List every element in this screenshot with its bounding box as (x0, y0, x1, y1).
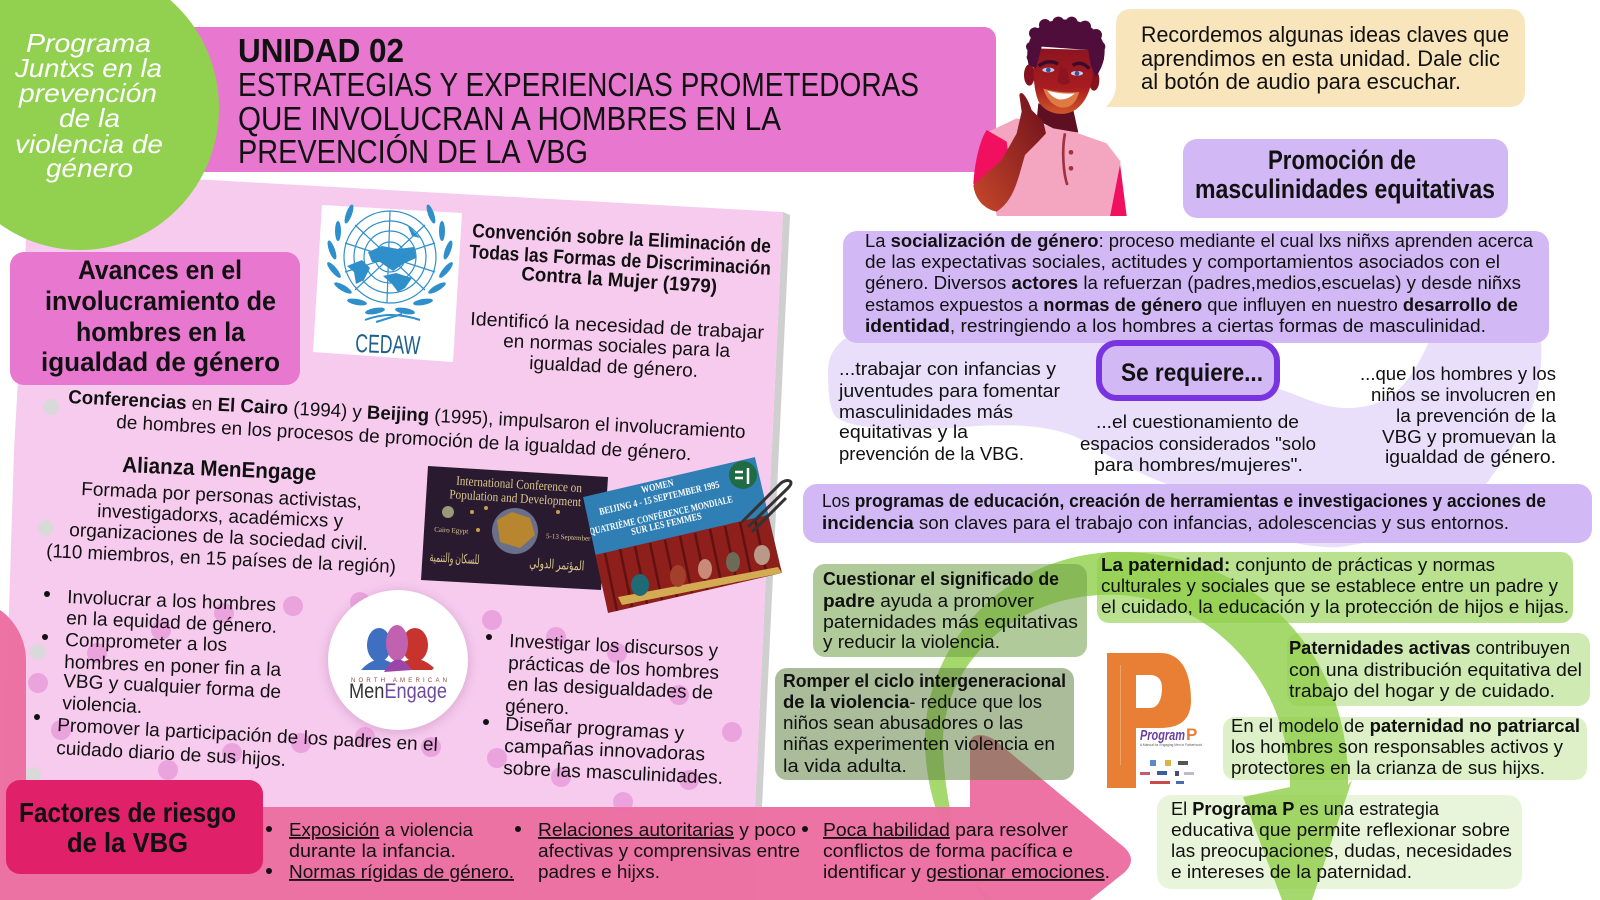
title: PREVENCIÓN DE LA VBG (238, 133, 588, 170)
text block: relaciones autoritarias (515, 819, 800, 882)
text block: exposición: Exposición a violencia (289, 819, 474, 840)
text block: poca habilidad: identificar y gestionar emociones . (823, 861, 1110, 882)
panel: socialización de género: género. Diversos actores la refuerzan (padres,medios,escuelas) y desde niñxs (865, 272, 1521, 293)
panel: cuestionar el significado de padre: paternidades más equitativas (823, 611, 1078, 632)
image: Beijing women conference photo: QUATRIÈME CONFÉRENCE MONDIALE (588, 493, 734, 538)
panel: romper el ciclo (775, 668, 1074, 780)
text block: Conferencias: Conferencias en El Cairo (1994) y Beijing (1995), impulsaron el involucramiento (68, 387, 746, 443)
text block: trabajar con infancias: masculinidades más (839, 401, 1013, 422)
text block: que los hombres se involucren: igualdad de género. (1385, 446, 1556, 467)
heading: masculinidades equitativas (1183, 139, 1508, 218)
bullets: left list: Comprometer a los (65, 630, 227, 656)
panel: socialización de género: identidad, restringiendo a los hombres a ciertas formas de masculinidad. (865, 315, 1486, 336)
text block: Convención: Contra la Mujer (1979) (521, 263, 718, 298)
title: ESTRATEGIAS Y EXPERIENCIAS PROMETEDORAS (238, 66, 919, 103)
image: Beijing women conference photo: BEIJING 4 - 15 SEPTEMBER 1995 (598, 480, 721, 518)
arrow: green circular arrow (925, 552, 1352, 900)
bullets: left list: hombres en poner fin a la (64, 652, 282, 681)
panel: paternidad no patriarcal: En el modelo de paternidad no patriarcal (1231, 715, 1580, 736)
panel: socialización de género (843, 230, 1549, 343)
panel: paternidades activas: trabajo del hogar y de cuidado. (1289, 680, 1555, 701)
icon: smiling young man pointing (973, 17, 1127, 216)
panel: programa P: El Programa P es una estrategia (1171, 798, 1440, 819)
panel: avances heading: hombres en la (76, 317, 246, 347)
image: Beijing women conference photo: WOMEN (640, 478, 675, 496)
text block: trabajar con infancias: ...trabajar con infancias y (839, 358, 1057, 379)
green circle with programme name: Programa (26, 28, 151, 58)
image: Program P manual cover: P (1186, 725, 1197, 744)
green circle with programme name: de la (59, 103, 120, 133)
image: ICPD Cairo conference poster: للسكان والتنمية (429, 549, 480, 568)
panel: programas de educación (803, 484, 1592, 543)
green circle with programme name (0, 0, 219, 250)
bullets: left list: en la equidad de género. (66, 608, 277, 638)
panel: la paternidad: La paternidad: conjunto de prácticas y normas (1101, 554, 1495, 575)
panel: avances heading: igualdad de género (41, 347, 280, 377)
panel: cuestionar el significado de padre: y reducir la violencia. (823, 631, 1000, 652)
panel: programa P (1157, 795, 1522, 889)
panel: socialización de género: de las expectativas sociales, actitudes y comportamientos asociados con el (865, 251, 1500, 272)
image: ICPD Cairo conference poster: International Conference on (456, 473, 583, 495)
text block: poca habilidad: conflictos de forma pacífica e (823, 840, 1073, 861)
panel: avances heading: Avances en el (78, 255, 242, 285)
panel: avances heading: involucramiento de (45, 286, 276, 316)
icon: MenEngage logo (326, 590, 470, 734)
bullets: right list: Diseñar programas y (505, 714, 685, 744)
panel: socialización de género: estamos expuestos a normas de género que influyen en nuestro desarrollo de (865, 294, 1518, 315)
callout: se requiere: Se requiere... (1121, 359, 1263, 387)
callout: se requiere (1099, 343, 1277, 398)
text block: poca habilidad: Poca habilidad para resolver (823, 819, 1068, 840)
bullets: right list: Investigar los discursos y (509, 631, 719, 662)
panel: romper el ciclo: la vida adulta. (783, 755, 907, 776)
title (238, 32, 919, 170)
text block: cuestionamiento de espacios: para hombres/mujeres". (1094, 454, 1303, 475)
text block: Convención: igualdad de género. (529, 353, 699, 382)
heading: masculinidades equitativas: Promoción de (1268, 145, 1416, 175)
icon: CEDAW United Nations logo: CEDAW (355, 328, 421, 360)
bullets: right list: en las desigualdades de (507, 674, 714, 704)
title: QUE INVOLUCRAN A HOMBRES EN LA (238, 100, 781, 137)
text block: que los hombres se involucren: ...que los hombres y los (1360, 363, 1556, 384)
panel: socialización de género: La socialización de género: proceso mediante el cual lxs niñxs aprenden acerca (865, 230, 1534, 251)
image: ICPD Cairo conference poster: Cairo Egypt (434, 525, 469, 535)
text block: que los hombres se involucren (1360, 363, 1557, 467)
image: Beijing women conference photo: FOURTH WORLD CONFERENCE ON (600, 454, 723, 493)
text block: que los hombres se involucren: VBG y promuevan la (1382, 426, 1557, 447)
image: ICPD Cairo conference poster: 5-13 September 1994 (546, 532, 607, 544)
panel: romper el ciclo: Romper el ciclo intergeneracional (783, 670, 1066, 691)
text block: relaciones autoritarias: Relaciones autoritarias y poco (538, 819, 796, 840)
panel: romper el ciclo: de la violencia- reduce que los (783, 691, 1042, 712)
text block: Alianza MenEngage: (110 miembros, en 15 países de la región) (46, 541, 396, 578)
panel: cuestionar el significado de padre: padre ayuda a promover (823, 590, 1034, 611)
panel: pale pink paper sheet (0, 170, 790, 900)
icon: CEDAW United Nations logo (313, 204, 462, 362)
panel: la paternidad: el cuidado, la educación y la protección de hijos e hijas. (1101, 596, 1569, 617)
heading: factores de riesgo: de la VBG (67, 827, 188, 858)
title: UNIDAD 02 (238, 32, 404, 69)
header banner background (170, 27, 996, 172)
text block: Alianza MenEngage: investigadorxs, académicxs y (97, 501, 344, 532)
panel: romper el ciclo: niños sean abusadores o las (783, 712, 1023, 733)
icon: MenEngage logo: NORTH AMERICAN (351, 678, 447, 684)
lavender background blob (828, 335, 1541, 547)
heading: factores de riesgo: Factores de riesgo (19, 797, 236, 828)
speech bubble: al botón de audio para escuchar. (1141, 69, 1461, 94)
speech bubble: Recordemos algunas ideas claves que (1141, 22, 1509, 47)
speech bubble: aprendimos en esta unidad. Dale clic (1141, 46, 1500, 71)
green circle with programme name: prevención (18, 78, 157, 108)
image: Program P manual cover: Program (1140, 727, 1185, 744)
bullets: right list: campañas innovadoras (504, 736, 705, 765)
text block: trabajar con infancias (838, 358, 1060, 464)
bullets: right list (483, 631, 723, 789)
image: Program P manual cover (1107, 653, 1202, 788)
bullets: left list (34, 587, 438, 771)
bullets: left list: cuidado diario de sus hijos. (56, 738, 287, 771)
panel: programas de educación: incidencia son claves para el trabajo con infancias, adolescencias y sus entornos. (822, 512, 1509, 533)
text block: exposición: Normas rígidas de género. (289, 861, 514, 882)
text block: relaciones autoritarias: padres e hijxs. (538, 861, 660, 882)
bullets: left list: Promover la participación de los padres en el (57, 715, 438, 756)
text block: exposición (266, 819, 514, 882)
text block: exposición: durante la infancia. (289, 840, 456, 861)
text block: cuestionamiento de espacios (1080, 411, 1316, 475)
icon: paperclip (742, 481, 791, 532)
text block: cuestionamiento de espacios: espacios considerados "solo (1080, 433, 1316, 454)
text block: Alianza MenEngage: Formada por personas activistas, (81, 479, 362, 513)
bullets: left list: Involucrar a los hombres (67, 587, 276, 616)
image: Program P manual cover: A Manual for Engaging Men in Fatherhood (1140, 742, 1202, 747)
image: Beijing women conference photo: SUR LES FEMMES (630, 511, 703, 538)
text block: relaciones autoritarias: afectivas y comprensivas entre (538, 840, 800, 861)
text block: trabajar con infancias: equitativas y la (839, 421, 969, 442)
text block: Alianza MenEngage: Alianza MenEngage (122, 452, 317, 485)
text block: Alianza MenEngage: organizaciones de la sociedad civil. (69, 520, 368, 555)
bullets: left list: VBG y cualquier forma de (63, 671, 282, 703)
heading: masculinidades equitativas: masculinidades equitativas (1195, 174, 1495, 204)
text block: Convención: en normas sociales para la (503, 331, 731, 362)
panel: cuestionar el significado de padre: Cuestionar el significado de (823, 568, 1059, 589)
panel: romper el ciclo: niñas experimenten violencia en (783, 733, 1055, 754)
text block: cuestionamiento de espacios: ...el cuestionamiento de (1096, 411, 1299, 432)
bullets: left list: violencia. (62, 693, 143, 718)
bullets: right list: sobre las masculinidades. (503, 758, 723, 789)
image: ICPD Cairo conference poster: المؤتمر الدولي (529, 555, 585, 574)
text block: que los hombres se involucren: niños se involucren en (1371, 384, 1556, 405)
green circle with programme name: Juntxs en la (14, 53, 162, 83)
panel: la paternidad (1097, 552, 1573, 623)
text block: Convención: Identificó la necesidad de trabajar (470, 309, 765, 344)
panel: paternidades activas (1287, 633, 1590, 706)
text block: Convención: Todas las Formas de Discriminación (469, 241, 771, 280)
image: Beijing women conference photo (583, 454, 782, 613)
green circle with programme name: género (46, 153, 133, 183)
text block: Conferencias: de hombres en los procesos de promoción de la igualdad de género. (116, 412, 692, 465)
heading: factores de riesgo (6, 780, 263, 874)
panel: avances heading (10, 252, 300, 385)
icon: MenEngage logo: MenEngage (349, 680, 447, 703)
panel: paternidad no patriarcal: los hombres son responsables activos y (1231, 736, 1564, 757)
panel: programas de educación: Los programas de educación, creación de herramientas e investigaciones y acciones de (822, 490, 1546, 511)
image: ICPD Cairo conference poster: Population and Development (449, 486, 582, 509)
panel: paternidades activas: Paternidades activas contribuyen (1289, 637, 1570, 658)
panel: programa P: educativa que permite reflexionar sobre (1171, 819, 1510, 840)
text block: poca habilidad (802, 819, 1110, 882)
green circle with programme name: violencia de (15, 129, 163, 159)
text block: Convención (469, 220, 772, 382)
text block: Convención: Convención sobre la Eliminación de (472, 220, 772, 258)
bullets: right list: prácticas de los hombres (508, 653, 720, 684)
bullets: right list: género. (505, 696, 570, 719)
panel: programa P: e intereses de la paternidad. (1171, 861, 1412, 882)
panel: cuestionar el significado de padre (813, 564, 1087, 657)
text block: trabajar con infancias: prevención de la VBG. (839, 443, 1024, 464)
text block: trabajar con infancias: juventudes para fomentar (838, 380, 1060, 401)
text block: que los hombres se involucren: la prevención de la (1396, 405, 1557, 426)
panel: programa P: las preocupaciones, dudas, necesidades (1171, 840, 1512, 861)
panel: paternidad no patriarcal (1223, 715, 1587, 780)
image: ICPD Cairo conference poster (421, 466, 610, 590)
panel: paternidad no patriarcal: protectores en la crianza de sus hijxs. (1231, 757, 1545, 778)
arrow: factores de riesgo banner (0, 610, 1131, 900)
panel: la paternidad: culturales y sociales que se establece entre un padre y (1101, 575, 1559, 596)
speech bubble (1106, 9, 1525, 107)
text block: Alianza MenEngage (46, 452, 396, 578)
panel: paternidades activas: con una distribución equitativa del (1289, 659, 1582, 680)
